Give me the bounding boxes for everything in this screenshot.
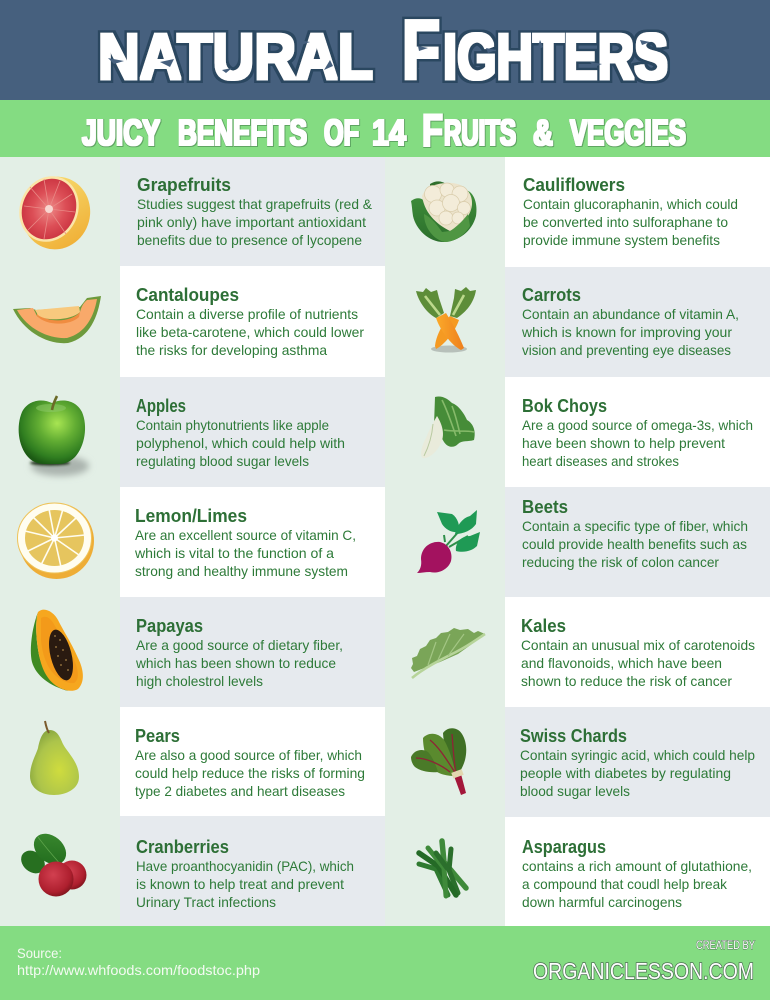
panel: Cranberries: Urinary Tract infections xyxy=(136,894,276,910)
panel: Asparagus xyxy=(505,817,770,926)
panel: Cantaloupes: Cantaloupes xyxy=(136,285,239,305)
panel: Apples: polyphenol, which could help with xyxy=(136,435,345,451)
panel: Kales: shown to reduce the risk of cancer xyxy=(521,673,732,689)
subtitle: OF xyxy=(324,112,359,153)
panel: Lemon/Limes: which is vital to the function of a xyxy=(134,545,334,561)
panel: Pears xyxy=(120,707,385,816)
panel: Cantaloupes: like beta-carotene, which could lower xyxy=(136,324,364,340)
panel: Swiss Chards: Contain syringic acid, which could help xyxy=(520,747,755,763)
subtitle: RUITS xyxy=(444,112,516,153)
subtitle band xyxy=(0,100,770,157)
subtitle: F xyxy=(422,105,443,156)
panel: Cauliflowers: Cauliflowers xyxy=(523,175,625,195)
header band xyxy=(0,0,770,100)
title: F xyxy=(402,3,440,97)
panel: Papayas xyxy=(120,597,385,707)
source text: http://www.whfoods.com/foodstoc.php xyxy=(17,962,260,978)
panel: Swiss Chards: Swiss Chards xyxy=(520,726,627,746)
source text xyxy=(17,945,260,978)
panel: Pears: Are also a good source of fiber, which xyxy=(135,747,362,763)
subtitle: BENEFITS xyxy=(178,112,307,153)
panel: Asparagus: down harmful carcinogens xyxy=(522,894,682,910)
credit xyxy=(533,938,755,984)
subtitle: 14 xyxy=(372,112,406,153)
panel: Cranberries xyxy=(120,816,385,926)
panel: Asparagus: contains a rich amount of glutathione, xyxy=(522,858,752,874)
icon: cantaloupe xyxy=(13,296,101,343)
panel: Cranberries: Have proanthocyanidin (PAC), which xyxy=(136,858,354,874)
panel: Apples xyxy=(120,377,385,487)
panel: Lemon/Limes xyxy=(120,487,385,597)
title: NATURAL xyxy=(98,20,373,93)
panel: Swiss Chards xyxy=(505,707,770,817)
panel: Cauliflowers xyxy=(505,157,770,267)
panel: Beets: could provide health benefits such as xyxy=(522,536,747,552)
panel: Papayas: Papayas xyxy=(136,616,203,636)
footer band xyxy=(0,926,770,1000)
panel: Carrots: Carrots xyxy=(522,285,581,305)
panel: Bok Choys: heart diseases and strokes xyxy=(522,453,679,469)
subtitle: JUICY xyxy=(82,112,160,153)
panel: Cranberries: Cranberries xyxy=(136,837,229,857)
icon: asparagus xyxy=(419,841,466,896)
panel: Cantaloupes xyxy=(120,266,385,377)
panel: Bok Choys xyxy=(505,377,770,487)
panel: Beets: Beets xyxy=(522,497,568,517)
panel: Beets: Contain a specific type of fiber, which xyxy=(522,518,748,534)
panel: Grapefruits: pink only) have important antioxidant xyxy=(137,214,366,230)
panel: Pears: type 2 diabetes and heart diseases xyxy=(135,783,345,799)
icon: grapefruit xyxy=(9,167,98,257)
icon: cranberries xyxy=(17,827,86,896)
icon: apple xyxy=(19,396,89,476)
panel: Grapefruits: Grapefruits xyxy=(137,175,231,195)
panel: Cantaloupes: the risks for developing asthma xyxy=(136,342,327,358)
panel: Lemon/Limes: Lemon/Limes xyxy=(135,506,247,526)
panel: Cauliflowers: provide immune system benefits xyxy=(523,232,720,248)
title: IGHTERS xyxy=(443,20,668,93)
panel: Kales: Contain an unusual mix of carotenoids xyxy=(521,637,755,653)
icon: carrots xyxy=(416,287,476,352)
panel: Papayas: which has been shown to reduce xyxy=(135,655,336,671)
panel: Apples: Contain phytonutrients like apple xyxy=(136,417,329,433)
panel: Apples: regulating blood sugar levels xyxy=(136,453,309,469)
panel: Carrots xyxy=(505,267,770,377)
icon: lemon xyxy=(18,503,94,579)
panel: Beets: reducing the risk of colon cancer xyxy=(522,554,719,570)
panel: Grapefruits: Studies suggest that grapefruits (red & xyxy=(137,196,373,212)
panel: Kales xyxy=(505,597,770,707)
panel: Papayas: Are a good source of dietary fiber, xyxy=(136,637,343,653)
credit: CREATED BY xyxy=(696,938,755,952)
panel: Cauliflowers: Contain glucoraphanin, which could xyxy=(523,196,738,212)
panel: Carrots: which is known for improving your xyxy=(521,324,732,340)
panel: Asparagus: a compound that coudl help break xyxy=(522,876,728,892)
icon: pear xyxy=(30,721,79,795)
icon: cauliflower xyxy=(411,181,477,242)
panel: Kales: and flavonoids, which have been xyxy=(521,655,722,671)
panel: Lemon/Limes: strong and healthy immune system xyxy=(135,563,348,579)
panel: Kales: Kales xyxy=(521,616,566,636)
panel: Cauliflowers: be converted into sulforaphane to xyxy=(523,214,728,230)
panel: Apples: Apples xyxy=(136,396,186,416)
panel: Swiss Chards: people with diabetes by regulating xyxy=(520,765,731,781)
icon: kale xyxy=(411,628,485,678)
icon: beet xyxy=(417,510,480,573)
panel: Carrots: Contain an abundance of vitamin A, xyxy=(522,306,739,322)
panel: Asparagus: Asparagus xyxy=(522,837,606,857)
icon: swiss chard xyxy=(411,728,466,795)
subtitle: VEGGIES xyxy=(570,112,686,153)
panel: Cantaloupes: Contain a diverse profile of nutrients xyxy=(136,306,358,322)
panel: Pears: could help reduce the risks of forming xyxy=(135,765,365,781)
subtitle: & xyxy=(533,112,553,153)
panel: Grapefruits: benefits due to presence of lycopene xyxy=(137,232,362,248)
panel: Swiss Chards: blood sugar levels xyxy=(520,783,630,799)
panel: Cranberries: is known to help treat and prevent xyxy=(136,876,344,892)
panel: Pears: Pears xyxy=(135,726,180,746)
panel: Beets xyxy=(505,487,770,597)
panel: Bok Choys: have been shown to help prevent xyxy=(522,435,725,451)
source text: Source: xyxy=(17,945,62,961)
panel: Carrots: vision and preventing eye diseases xyxy=(522,342,731,358)
icon: papaya xyxy=(31,610,83,691)
icon: bok choy xyxy=(421,396,475,458)
panel: Grapefruits xyxy=(120,157,385,266)
panel: Bok Choys: Bok Choys xyxy=(522,396,607,416)
panel: Lemon/Limes: Are an excellent source of vitamin C, xyxy=(135,527,356,543)
panel: Papayas: high cholestrol levels xyxy=(136,673,263,689)
panel: Bok Choys: Are a good source of omega-3s, which xyxy=(522,417,753,433)
